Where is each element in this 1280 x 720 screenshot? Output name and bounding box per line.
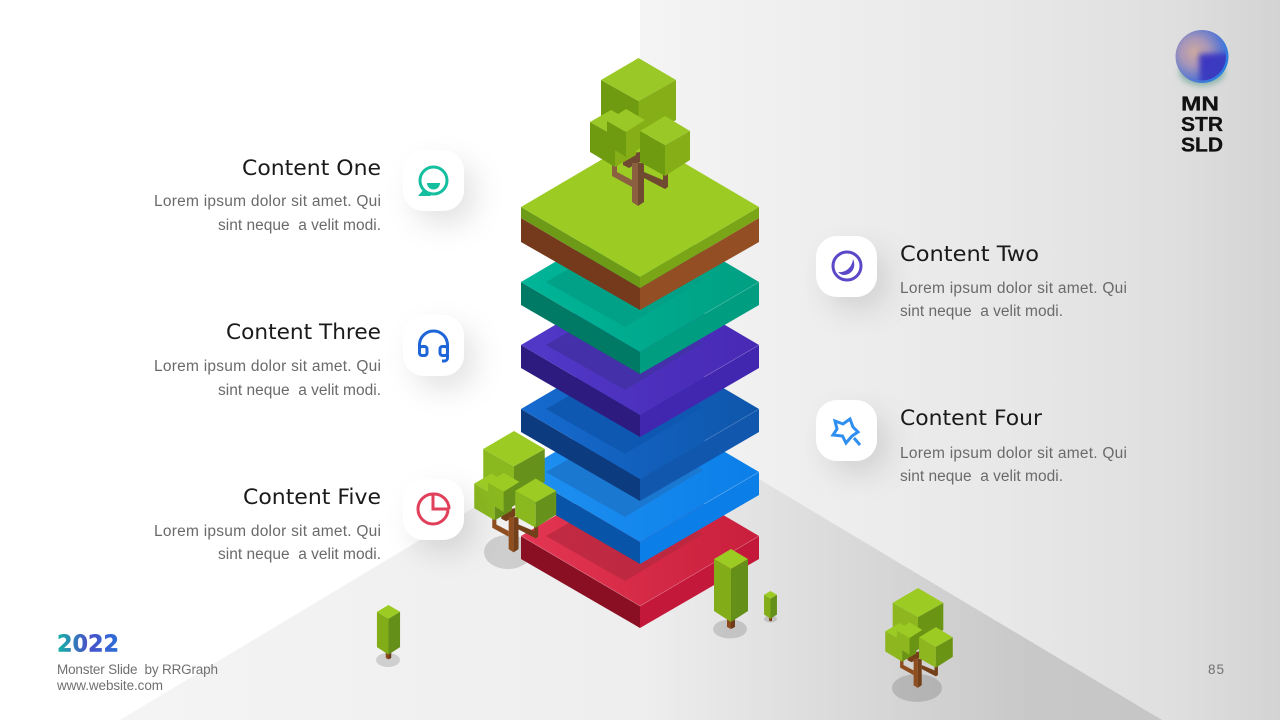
footer credit: www.website.com	[56, 678, 163, 693]
heading: Content Two: Content Two	[900, 242, 1039, 266]
text: Content Five description: Lorem ipsum dolor sit amet. Qui	[154, 523, 381, 540]
block: Content Two	[816, 236, 1127, 320]
text: Content Three description	[154, 358, 381, 399]
heading: Content Four: Content Four	[900, 406, 1042, 430]
icon card: magic wand star	[816, 400, 877, 461]
tree shadows on floor	[376, 535, 942, 702]
page number: 85	[1208, 662, 1224, 677]
logo wordmark: SLD	[1181, 134, 1223, 156]
icon card: headset	[403, 315, 464, 376]
text: Content One description	[154, 193, 381, 234]
text: Content Five description	[154, 523, 381, 563]
heading: Content Five: Content Five	[243, 485, 381, 509]
text: Content Four description: Lorem ipsum dolor sit amet. Qui	[900, 445, 1127, 462]
icon card: moon	[816, 236, 877, 297]
footer credit	[56, 662, 218, 693]
icon card: chat smile	[403, 150, 464, 211]
text: Content One description: sint neque a velit modi.	[218, 217, 381, 234]
logo: gradient ball	[1176, 30, 1232, 90]
layer: red base	[521, 466, 759, 628]
text: Content Two description	[900, 280, 1127, 320]
tree bottom right	[885, 588, 953, 688]
text: Content Two description: sint neque a velit modi.	[900, 303, 1063, 320]
block: Content Three	[154, 315, 464, 399]
tree beside tower	[474, 431, 556, 552]
text: Content Three description: Lorem ipsum dolor sit amet. Qui	[154, 358, 381, 375]
layer: teal	[521, 212, 759, 374]
text: Content Five description: sint neque a velit modi.	[218, 546, 381, 563]
footer credit: Monster Slide by RRGraph	[57, 662, 218, 677]
layer: grass and soil top	[521, 137, 759, 310]
isometric layered tower	[521, 137, 759, 628]
layer: purple	[521, 275, 759, 437]
logo wordmark	[1181, 92, 1223, 156]
year label: 2022	[57, 632, 119, 658]
isometric floor	[120, 408, 1162, 720]
tiny tree	[764, 591, 777, 621]
icon card: pie chart	[403, 479, 464, 540]
text: Content Four description: sint neque a velit modi.	[900, 468, 1063, 485]
heading: Content One: Content One	[242, 156, 381, 180]
tree on top of tower	[590, 58, 690, 206]
logo wordmark: STR	[1181, 113, 1223, 136]
text: Content Two description: Lorem ipsum dolor sit amet. Qui	[900, 280, 1127, 297]
layer: blue	[521, 339, 759, 501]
logo wordmark: MN	[1181, 92, 1219, 116]
block: Content Four	[816, 400, 1127, 485]
block: Content Five	[154, 479, 464, 563]
heading: Content Three: Content Three	[226, 320, 381, 344]
text: Content Four description	[900, 445, 1127, 485]
text: Content One description: Lorem ipsum dolor sit amet. Qui	[154, 193, 381, 210]
tall tree near tower	[714, 549, 748, 629]
layer: light blue	[521, 402, 759, 564]
block: Content One	[154, 150, 464, 234]
text: Content Three description: sint neque a velit modi.	[218, 382, 381, 399]
tall tree on left floor	[377, 605, 400, 659]
